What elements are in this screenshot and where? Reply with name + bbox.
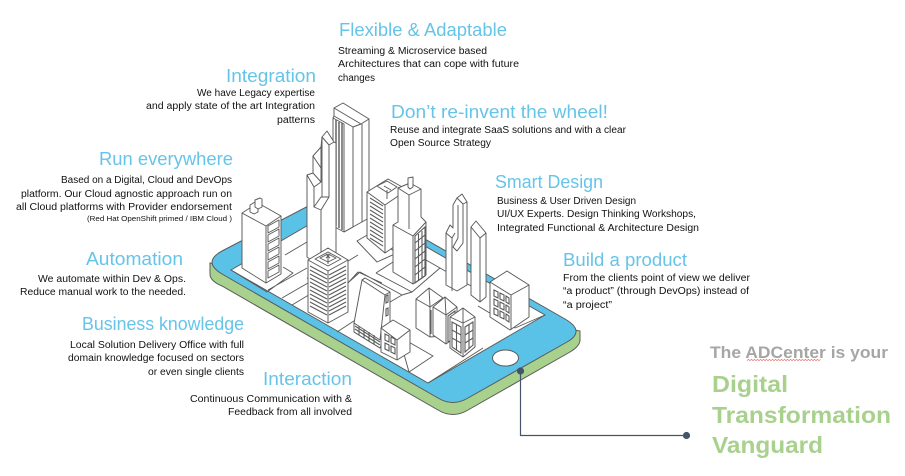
callout: build a product: “a product” (through DevOps) instead of xyxy=(563,286,749,297)
callout: automation: We automate within Dev & Ops. xyxy=(38,274,186,285)
tagline xyxy=(710,344,891,458)
phone screen frame xyxy=(212,190,576,402)
phone body edge xyxy=(210,263,580,414)
callout: integration: patterns xyxy=(277,115,315,126)
callout: automation: Automation xyxy=(86,248,183,269)
home button xyxy=(492,350,518,366)
callout: don't re-invent the wheel: Don’t re-invent the wheel! xyxy=(391,101,608,122)
callout: business knowledge xyxy=(68,313,244,378)
callout: don't re-invent the wheel xyxy=(390,101,627,149)
twin slim towers xyxy=(446,194,486,302)
tagline: Transformation xyxy=(712,402,891,428)
callout: run everywhere xyxy=(16,148,233,223)
callout: integration: and apply state of the art Integration xyxy=(146,101,315,112)
callout: flexible & adaptable: Streaming & Microservice based xyxy=(338,46,487,57)
callout: automation xyxy=(20,248,186,298)
connector line xyxy=(520,371,686,436)
illustration: isometric city on a phone xyxy=(210,103,580,414)
callout: business knowledge: domain knowledge focused on sectors xyxy=(68,353,244,364)
connector end dot xyxy=(683,432,690,439)
callout: automation: Reduce manual work to the needed. xyxy=(20,287,186,298)
tagline: Vanguard xyxy=(712,432,823,458)
callout: run everywhere: Based on a Digital, Cloud and DevOps xyxy=(61,175,232,186)
callout: integration xyxy=(146,65,316,126)
callout: don't re-invent the wheel: Reuse and integrate SaaS solutions and with a clear xyxy=(390,125,627,136)
three peaked buildings xyxy=(416,288,475,357)
callout: flexible & adaptable xyxy=(338,19,519,84)
callout: integration: Integration xyxy=(226,65,316,86)
tagline: Digital xyxy=(712,371,788,397)
box building right xyxy=(490,271,529,330)
callout: flexible & adaptable: changes xyxy=(338,73,375,84)
slanted roof building xyxy=(354,278,390,348)
striped tower centre-right xyxy=(367,179,404,253)
small building front xyxy=(381,320,410,360)
callout: flexible & adaptable: Flexible & Adaptable xyxy=(339,19,507,40)
callout: business knowledge: Local Solution Delivery Office with full xyxy=(70,340,244,351)
callout: interaction: Interaction xyxy=(263,368,352,389)
callout: smart design: Business & User Driven Design xyxy=(497,196,636,207)
city streets xyxy=(231,234,545,383)
callout: business knowledge: or even single clients xyxy=(148,367,244,378)
phone screen city ground xyxy=(231,202,545,383)
callout: don't re-invent the wheel: Open Source Strategy xyxy=(390,138,491,149)
callout: build a product: Build a product xyxy=(563,249,687,270)
callout: build a product: From the clients point of view we deliver xyxy=(563,273,751,284)
callout: interaction: Continuous Communication with & xyxy=(190,394,352,405)
callout: smart design xyxy=(495,171,699,234)
callout: integration: We have Legacy expertise xyxy=(197,88,315,99)
callout: run everywhere: all Cloud platforms with Provider endorsement xyxy=(16,202,232,213)
callout: flexible & adaptable: Architectures that can cope with future xyxy=(338,59,519,70)
roof box xyxy=(250,202,258,214)
callout: run everywhere: platform. Our Cloud agnostic approach run on xyxy=(21,189,232,200)
windowed tower with setback xyxy=(393,177,426,284)
callout: interaction xyxy=(190,368,352,418)
callout: smart design: Smart Design xyxy=(495,171,603,192)
tagline: The ADCenter is your xyxy=(710,344,889,362)
windowed tower left xyxy=(242,198,281,283)
callout: smart design: Integrated Functional & Architecture Design xyxy=(497,223,699,234)
callout: interaction: Feedback from all involved xyxy=(228,407,352,418)
connector dot on phone xyxy=(517,367,524,375)
callout: run everywhere: (Red Hat OpenShift primed / IBM Cloud ) xyxy=(87,214,233,223)
zigzag tower xyxy=(307,131,336,268)
callout: build a product: “a project” xyxy=(563,300,612,311)
callout: build a product xyxy=(563,249,751,311)
skyscraper with stripes xyxy=(333,103,369,232)
callout: smart design: UI/UX Experts. Design Thinking Workshops, xyxy=(497,209,696,220)
callout: business knowledge: Business knowledge xyxy=(82,313,244,334)
striped tower front xyxy=(308,248,348,323)
callout: run everywhere: Run everywhere xyxy=(99,148,233,169)
